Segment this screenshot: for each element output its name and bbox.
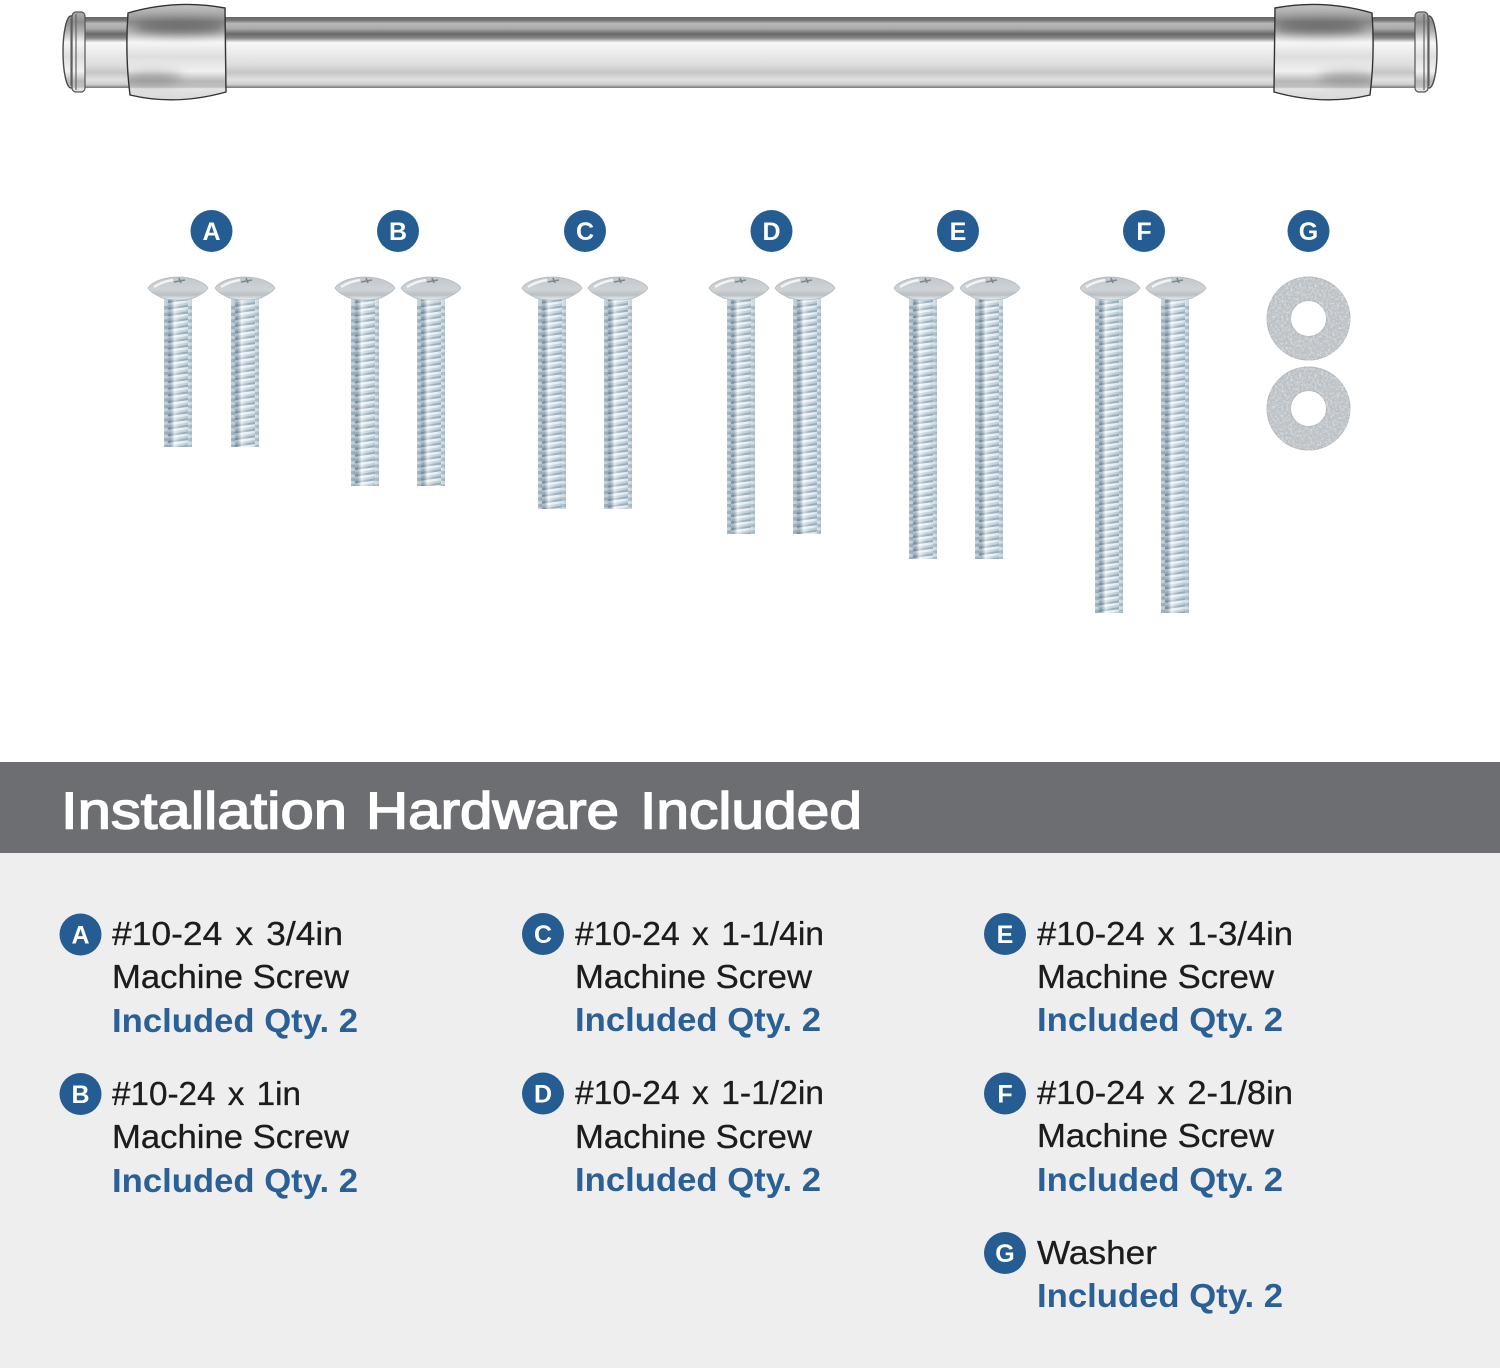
list item C: Included Qty. 2 (575, 1001, 821, 1038)
list item G: Included Qty. 2 (1037, 1277, 1283, 1314)
hardware set D (709, 210, 835, 534)
list item A (60, 914, 358, 1039)
list item F: F (997, 1080, 1013, 1108)
right barrel post and end cap (1274, 4, 1437, 100)
badge D (750, 210, 792, 252)
screw C left (522, 277, 582, 509)
list item B (60, 1073, 358, 1199)
badge E (937, 210, 979, 252)
screw A left (148, 277, 208, 447)
list item E: E (997, 921, 1013, 949)
title: Included (640, 782, 862, 840)
list item F: #10-24 x 2-1/8in (1037, 1074, 1293, 1111)
list item A: #10-24 x 3/4in (112, 915, 343, 952)
hardware set F (1080, 210, 1206, 613)
panel: hardware list (0, 853, 1500, 1368)
badge E: E (950, 218, 966, 246)
badge C (564, 210, 606, 252)
list item C: C (534, 921, 552, 949)
badge F: F (1136, 218, 1152, 246)
pull bar shaft (225, 17, 1275, 88)
badge B (377, 210, 419, 252)
list item C (522, 913, 824, 1038)
title: Hardware (366, 782, 619, 840)
hardware set C (522, 210, 648, 509)
title (61, 782, 862, 840)
screw F left (1080, 277, 1140, 613)
hardware set G (1267, 210, 1350, 450)
list item B: #10-24 x 1in (112, 1075, 301, 1112)
list item G: G (995, 1240, 1015, 1268)
list item E: Machine Screw (1037, 958, 1274, 995)
list item F: Included Qty. 2 (1037, 1161, 1283, 1198)
hardware set E (894, 210, 1020, 559)
badge C: C (576, 218, 594, 246)
list item D (522, 1072, 824, 1198)
list item D: Machine Screw (575, 1118, 812, 1155)
hardware set B (335, 210, 461, 486)
list item D: D (534, 1080, 552, 1108)
list item E (984, 913, 1293, 1038)
screw A right (215, 277, 275, 447)
list item C: Machine Screw (575, 958, 812, 995)
title: Installation (61, 782, 347, 840)
badge A: A (202, 218, 221, 246)
hardware set A (148, 210, 275, 447)
list item G: Washer (1037, 1234, 1157, 1271)
washer top (1267, 277, 1350, 360)
heading band (0, 762, 1500, 853)
screw E right (960, 277, 1020, 559)
screw E left (894, 277, 954, 559)
list item B: Included Qty. 2 (112, 1162, 358, 1199)
list item A: A (71, 922, 90, 950)
list item D: #10-24 x 1-1/2in (575, 1074, 824, 1111)
list item G (984, 1232, 1283, 1314)
list item A: Included Qty. 2 (112, 1002, 358, 1039)
list item D: Included Qty. 2 (575, 1161, 821, 1198)
left barrel post and end cap (63, 4, 226, 100)
cabinet pull bar product image (63, 4, 1437, 100)
badge A (190, 210, 232, 252)
badge B: B (389, 218, 407, 246)
washer bottom (1267, 367, 1350, 450)
badge F (1123, 210, 1165, 252)
screw F right (1146, 277, 1206, 613)
badge G (1288, 210, 1330, 252)
screw B left (335, 277, 395, 486)
screw D left (709, 277, 769, 534)
list item B: Machine Screw (112, 1118, 349, 1155)
list item F (984, 1072, 1293, 1198)
screw B right (401, 277, 461, 486)
screw C right (588, 277, 648, 509)
list item A: Machine Screw (112, 958, 349, 995)
list item E: #10-24 x 1-3/4in (1037, 915, 1293, 952)
badge G: G (1299, 218, 1318, 246)
list item F: Machine Screw (1037, 1117, 1274, 1154)
badge D: D (762, 218, 781, 246)
list item C: #10-24 x 1-1/4in (575, 915, 824, 952)
screw D right (775, 277, 835, 534)
list item E: Included Qty. 2 (1037, 1001, 1283, 1038)
list item B: B (71, 1081, 90, 1109)
